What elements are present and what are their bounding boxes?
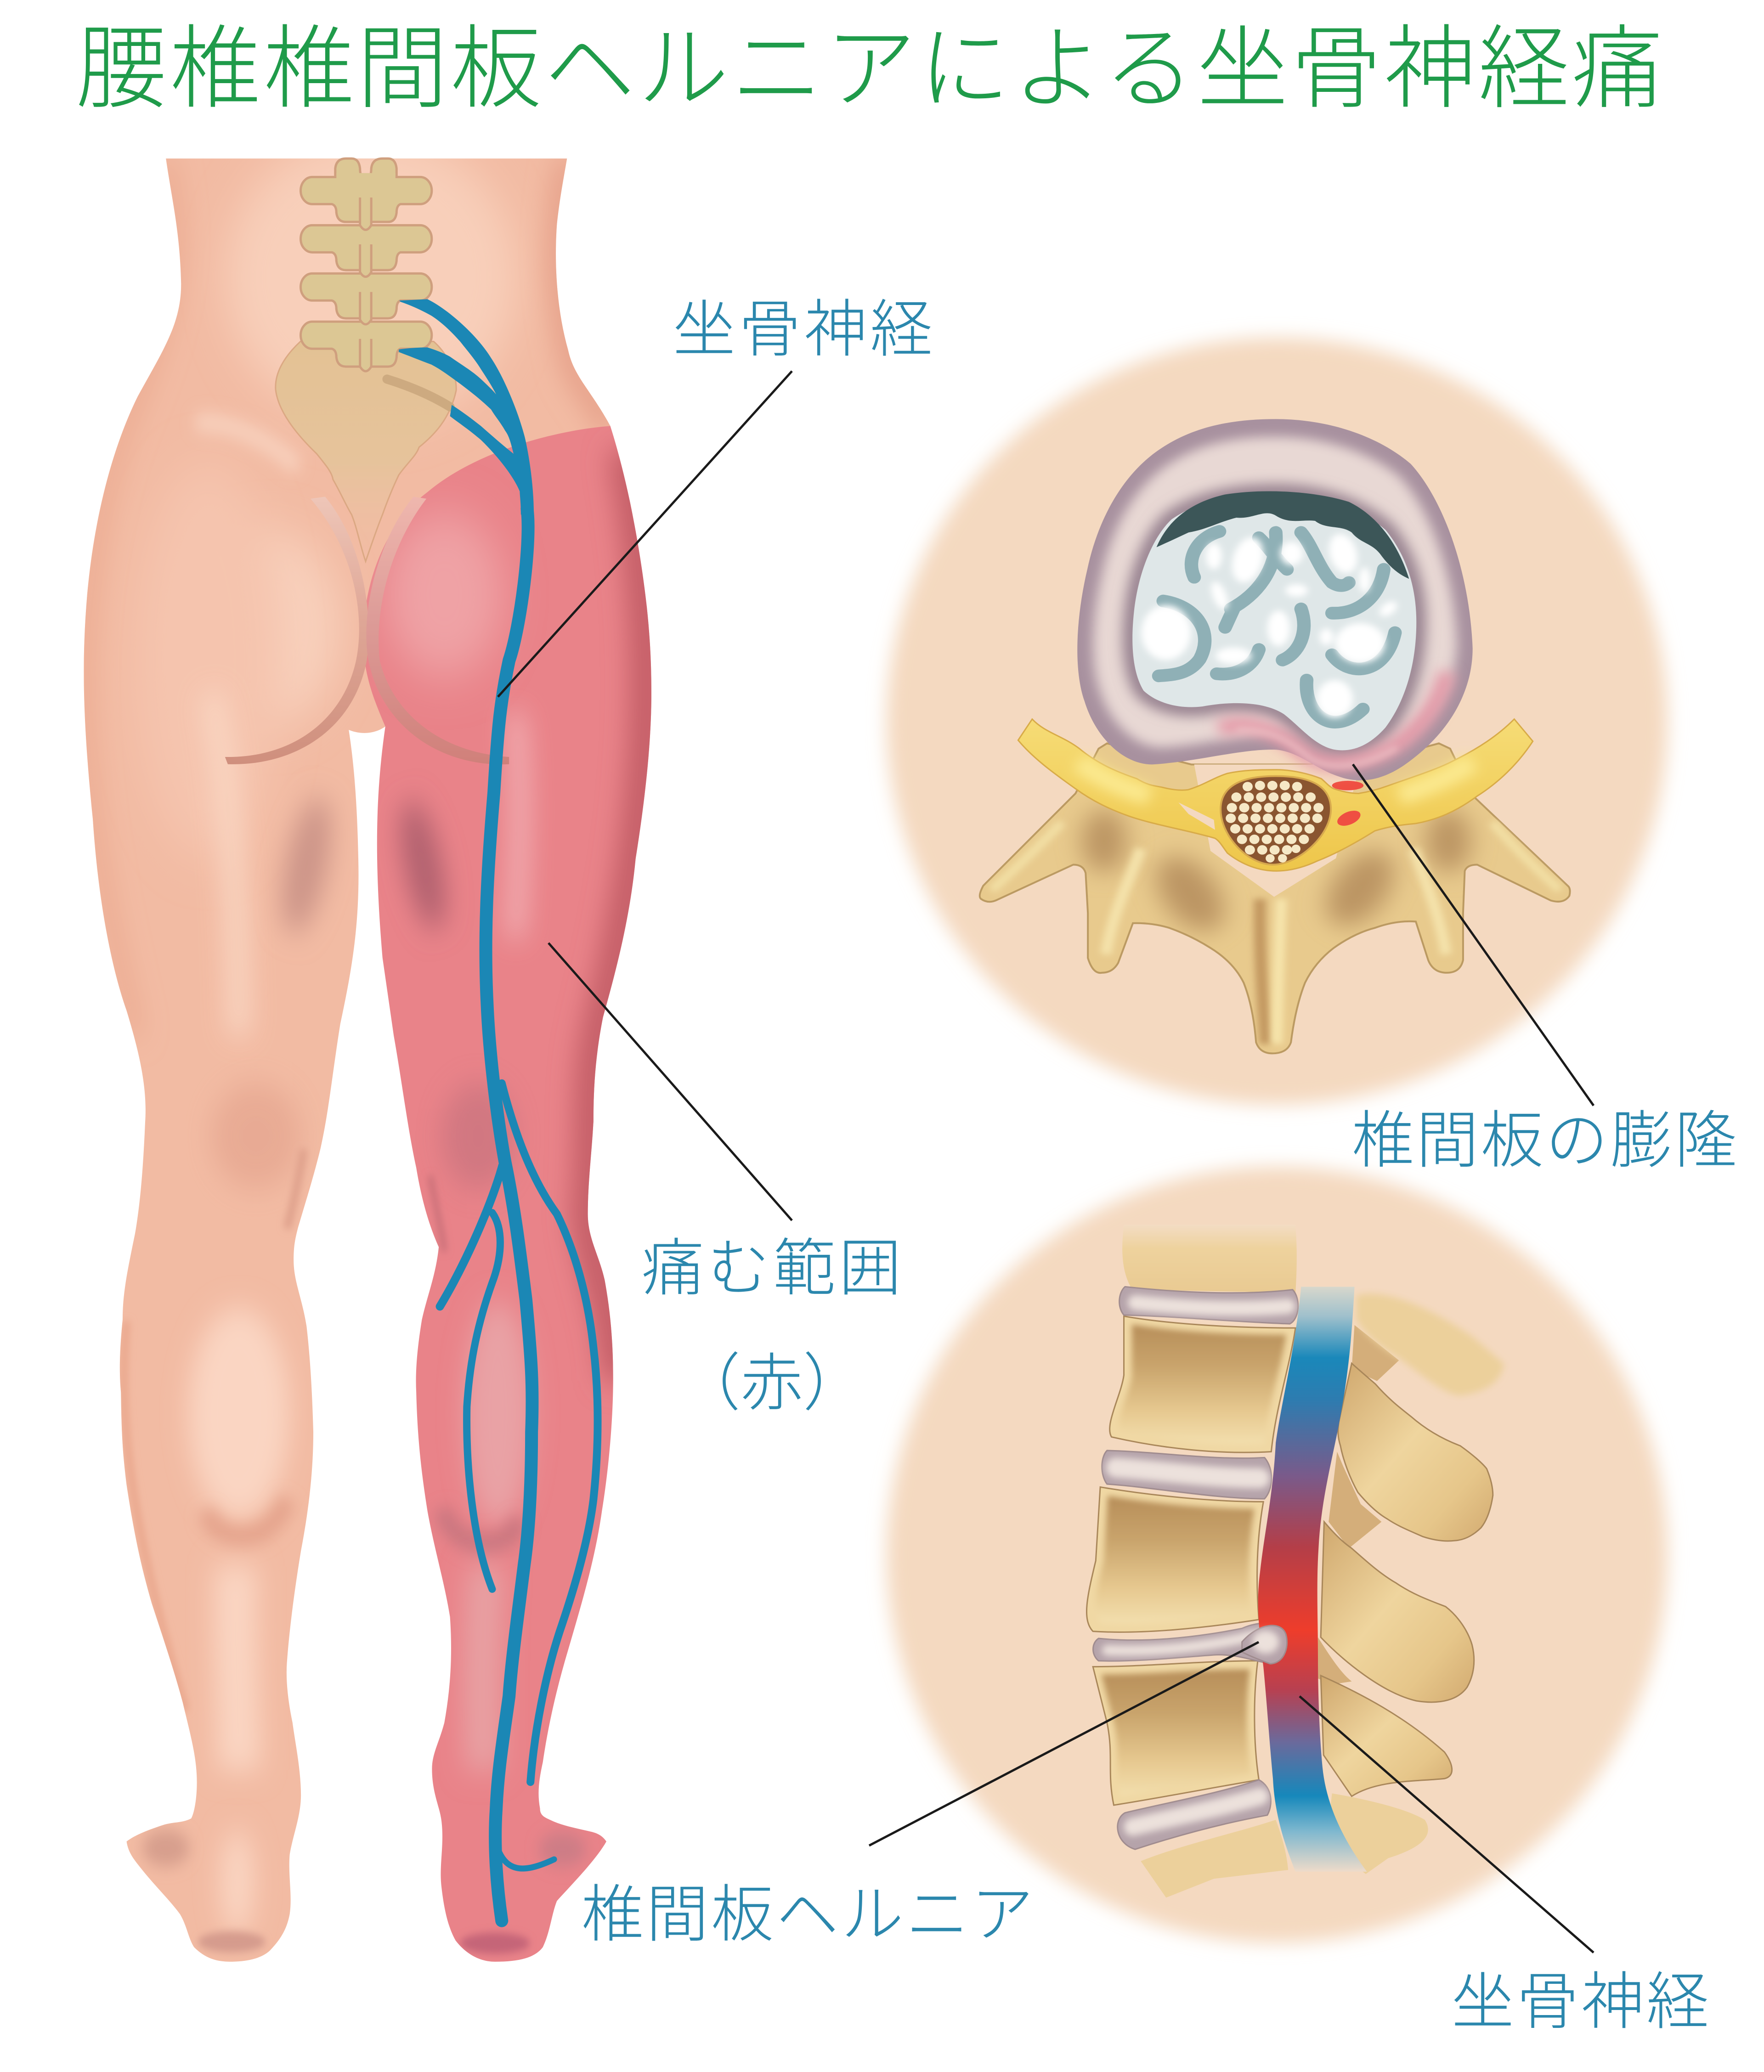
intervertebral disc with bulge — [1077, 419, 1473, 780]
painful area (red) — [363, 426, 651, 1962]
nucleus — [1132, 491, 1416, 750]
sacral nerve shadow — [387, 379, 450, 407]
label: disc bulge: 椎間板の膨隆 — [1351, 1106, 1737, 1175]
label: sciatic nerve (bottom): 坐骨神経 — [1452, 1967, 1709, 2037]
leader line: pain area — [548, 943, 792, 1220]
nerve root band (yellow) — [1018, 719, 1533, 871]
label: red note: （赤） — [678, 1348, 865, 1418]
label: pain area: 痛む範囲 — [642, 1233, 901, 1303]
inflamed spots — [1332, 781, 1363, 829]
panel: spine side view circle — [887, 1167, 1668, 1943]
background circle — [887, 1167, 1668, 1943]
leader line: disc bulge — [1353, 764, 1594, 1106]
spinal cord bundle — [1221, 776, 1331, 864]
label: sciatic nerve (top): 坐骨神経 — [673, 294, 933, 364]
lumbar vertebrae — [300, 158, 432, 371]
intervertebral discs — [1093, 1287, 1298, 1849]
sacrum — [276, 341, 456, 561]
herniated disc tip — [1242, 1626, 1287, 1664]
background circle — [887, 338, 1668, 1105]
gluteal creases — [225, 497, 509, 764]
body silhouette: torso and unaffected left leg — [84, 132, 651, 1962]
title: 腰椎椎間板ヘルニアによる坐骨神経痛 — [76, 18, 1663, 119]
panel: body rear view — [84, 132, 651, 1962]
spinous processes — [1318, 1294, 1504, 1874]
label: disc herniation: 椎間板ヘルニア — [581, 1880, 1034, 1949]
leader line: sciatic nerve (spine) — [1300, 1696, 1594, 1953]
leader line: sciatic nerve (leg) — [498, 371, 792, 697]
vertebral arch — [980, 743, 1570, 1053]
sciatic nerve — [399, 299, 598, 1921]
vertebral bodies — [1086, 1225, 1297, 1897]
panel: disc cross-section circle — [887, 338, 1668, 1105]
leader line: disc herniation — [869, 1642, 1259, 1846]
sciatic nerve canal (blue to red) — [1258, 1287, 1367, 1872]
